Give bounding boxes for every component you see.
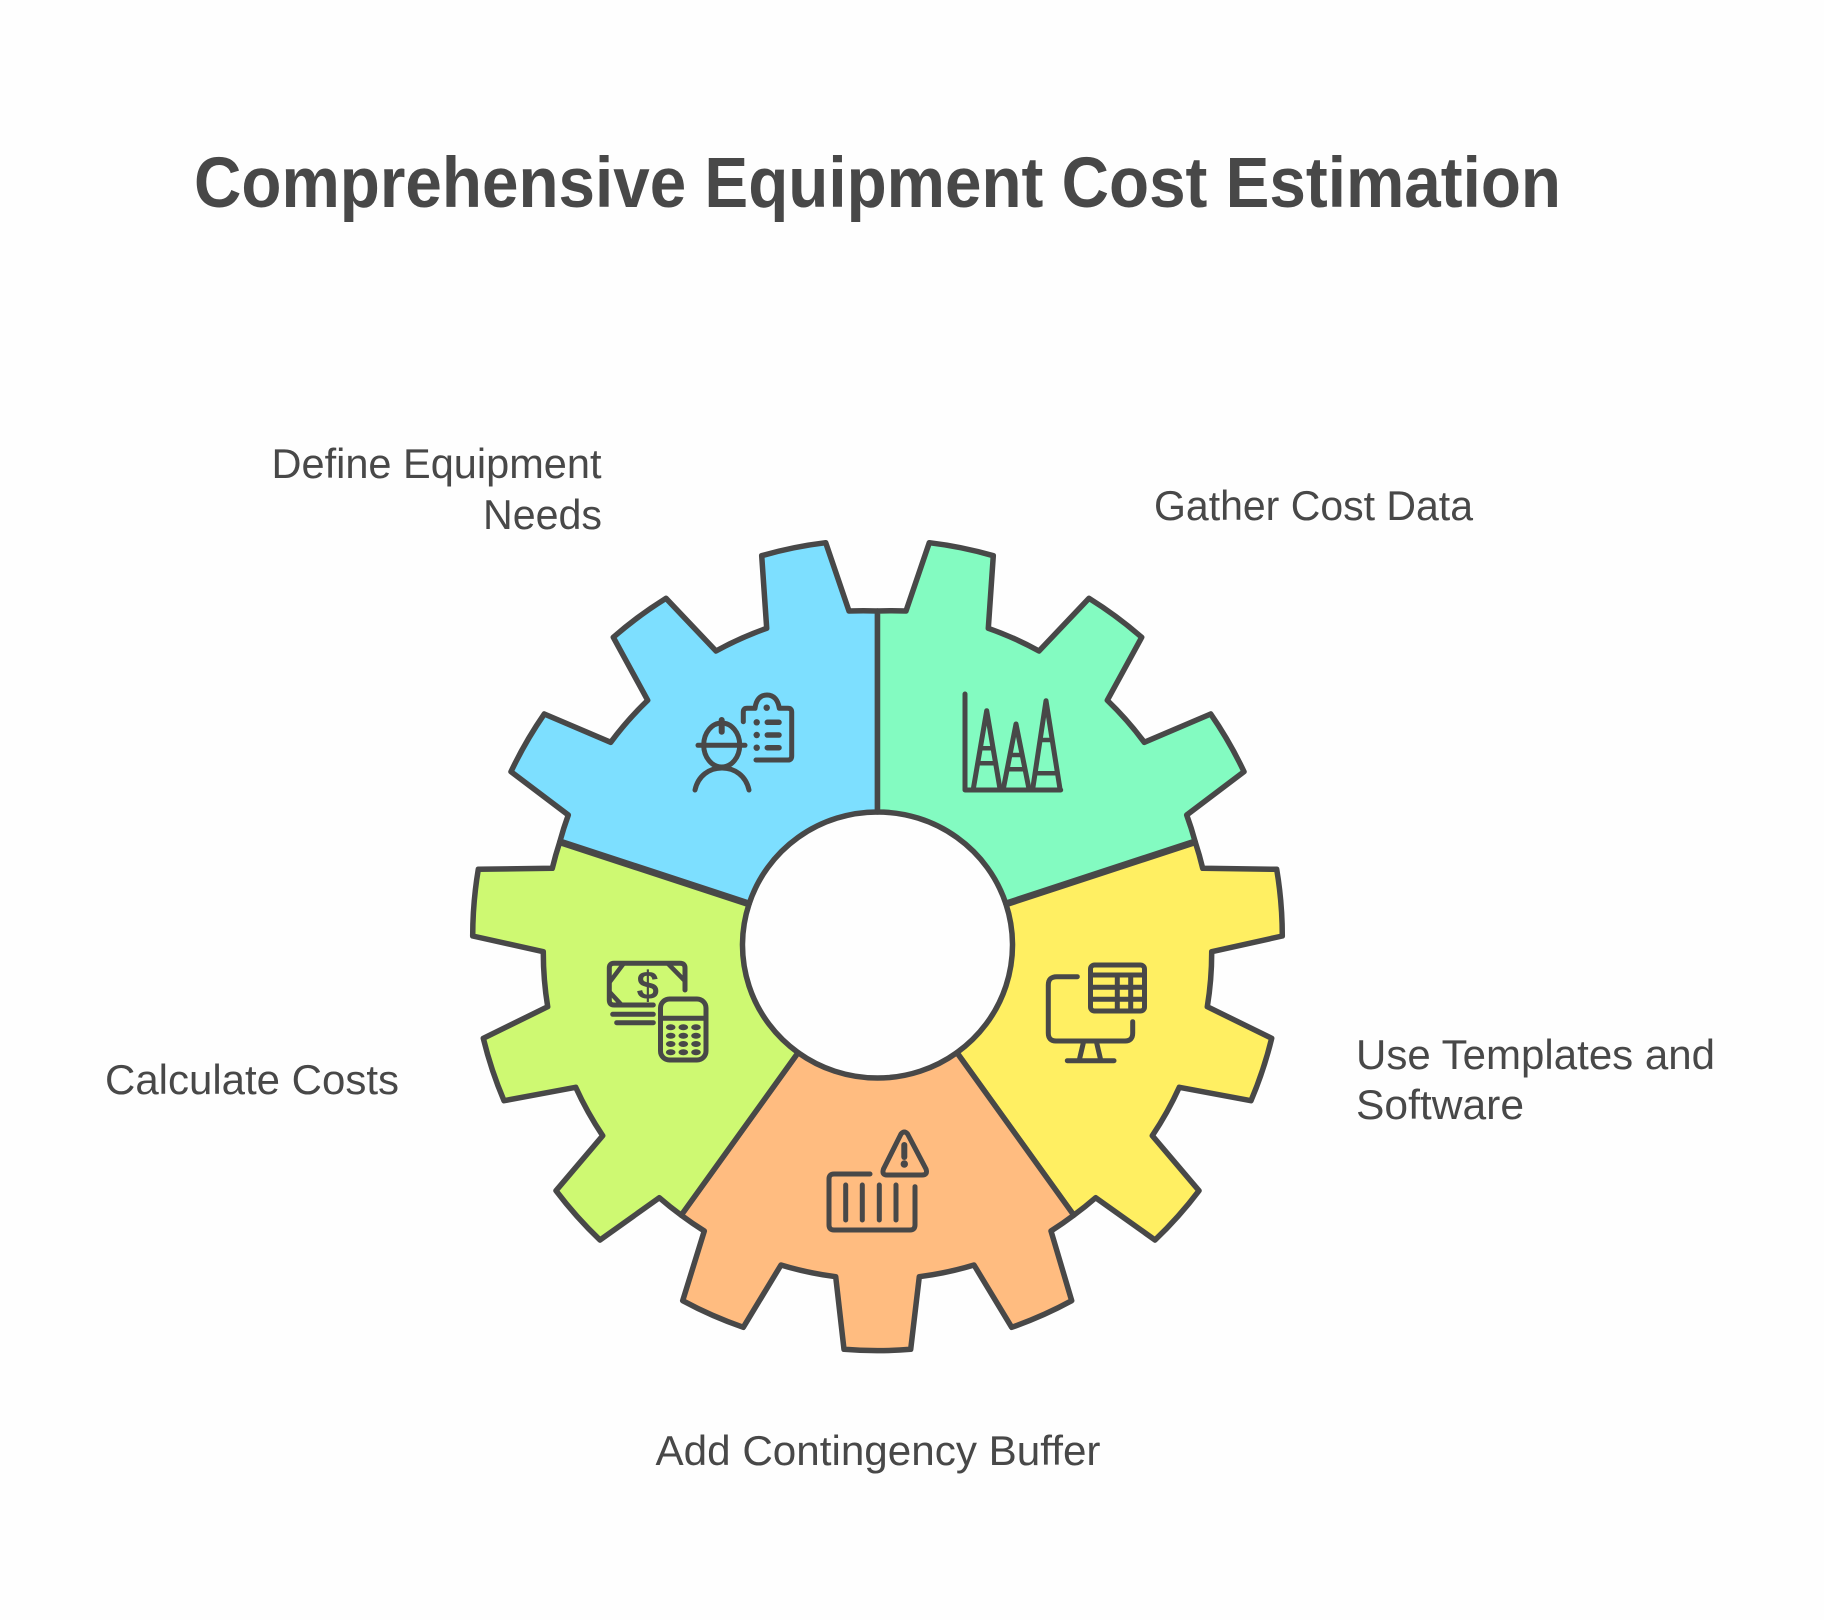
label: Define Equipment Needs: Define Equipment bbox=[272, 440, 602, 487]
icon: peaks chart bbox=[965, 694, 1061, 790]
icon: banknote and calculator: $ bbox=[637, 964, 659, 1008]
gear segment: Gather Cost Data bbox=[878, 543, 1244, 904]
label: Gather Cost Data: Gather Cost Data bbox=[1154, 482, 1474, 529]
label: Use Templates and Software: Use Templates and bbox=[1356, 1031, 1715, 1078]
blue gear shape bbox=[511, 543, 878, 904]
icon: worker with clipboard bbox=[695, 695, 792, 790]
icon: banknote and calculator bbox=[609, 963, 706, 1060]
label: Add Contingency Buffer: Add Contingency Buffer bbox=[656, 1427, 1100, 1474]
lime gear shape bbox=[473, 842, 798, 1240]
yellow gear shape bbox=[957, 842, 1282, 1240]
label: Define Equipment Needs bbox=[272, 440, 602, 538]
label: Calculate Costs: Calculate Costs bbox=[105, 1056, 399, 1103]
icon: monitor with table bbox=[1048, 965, 1144, 1061]
label: Use Templates and Software: Software bbox=[1356, 1081, 1524, 1128]
icon: container with warning bbox=[829, 1132, 926, 1230]
gear segment: Calculate Costs bbox=[473, 842, 798, 1240]
label: Define Equipment Needs: Needs bbox=[483, 491, 602, 538]
label: Use Templates and Software bbox=[1356, 1031, 1715, 1128]
gear segment: Define Equipment Needs bbox=[511, 543, 878, 904]
gear segment: Use Templates and Software bbox=[957, 842, 1282, 1240]
title: Comprehensive Equipment Cost Estimation bbox=[194, 144, 1561, 223]
orange gear shape bbox=[681, 1053, 1074, 1351]
green gear shape bbox=[878, 543, 1244, 904]
gear segment: Add Contingency Buffer bbox=[681, 1053, 1074, 1351]
